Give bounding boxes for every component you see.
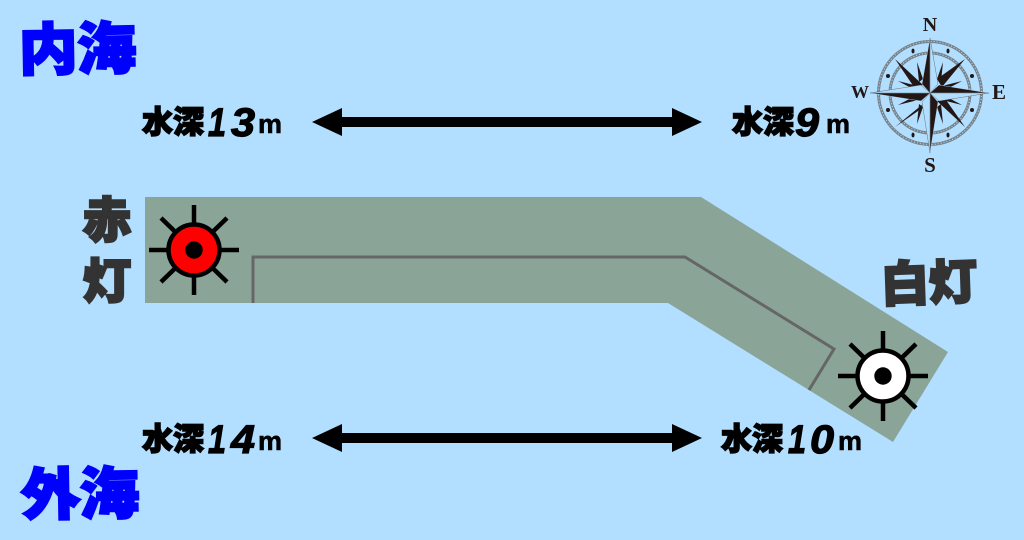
heading: outer sea: 外海 — [20, 449, 140, 532]
depth label: 14m: 4 — [230, 418, 255, 462]
depth label: 10m: 0 — [810, 418, 834, 462]
depth label: 10m: 1 — [788, 418, 806, 462]
label: red light: 赤 — [83, 181, 131, 251]
label: white light: 白 — [880, 244, 930, 316]
depth label: 9m: 9 — [795, 101, 820, 145]
compass letters: W — [851, 82, 869, 102]
arrow: outer span — [312, 424, 702, 452]
depth label: 13m: m — [258, 109, 282, 139]
depth label: 14m: 水深 — [142, 414, 204, 459]
depth label: 13m: 水深 — [142, 97, 204, 142]
label: white light — [880, 242, 978, 316]
depth label: 13m: 1 — [208, 101, 226, 145]
depth label: 13m: 3 — [231, 101, 255, 145]
heading: inner sea: 内海 — [18, 4, 137, 87]
depth label: 13m — [142, 97, 282, 145]
label: red light: 灯 — [83, 242, 131, 312]
depth label: 14m: 1 — [208, 418, 226, 462]
compass letters: N — [923, 14, 938, 36]
depth label: 9m: m — [826, 109, 850, 139]
compass letters: E — [992, 80, 1006, 104]
label: white light: 灯 — [928, 242, 978, 314]
depth label: 9m: 水深 — [732, 97, 794, 142]
label: red light — [83, 181, 131, 312]
breakwater inner wall line — [253, 257, 834, 390]
depth label: 10m: m — [838, 426, 862, 456]
depth label: 14m: m — [258, 426, 282, 456]
icon: compass rose — [851, 14, 1006, 177]
compass letters — [851, 14, 1006, 177]
icon: white lighthouse — [838, 331, 928, 421]
icon: red lighthouse — [149, 205, 239, 295]
compass letters: S — [924, 153, 936, 177]
arrow: inner span — [312, 108, 702, 136]
depth label: 9m — [732, 97, 850, 145]
depth label: 10m — [721, 414, 862, 462]
depth label: 14m — [142, 414, 282, 462]
breakwater — [145, 197, 948, 442]
depth label: 10m: 水深 — [721, 414, 783, 459]
